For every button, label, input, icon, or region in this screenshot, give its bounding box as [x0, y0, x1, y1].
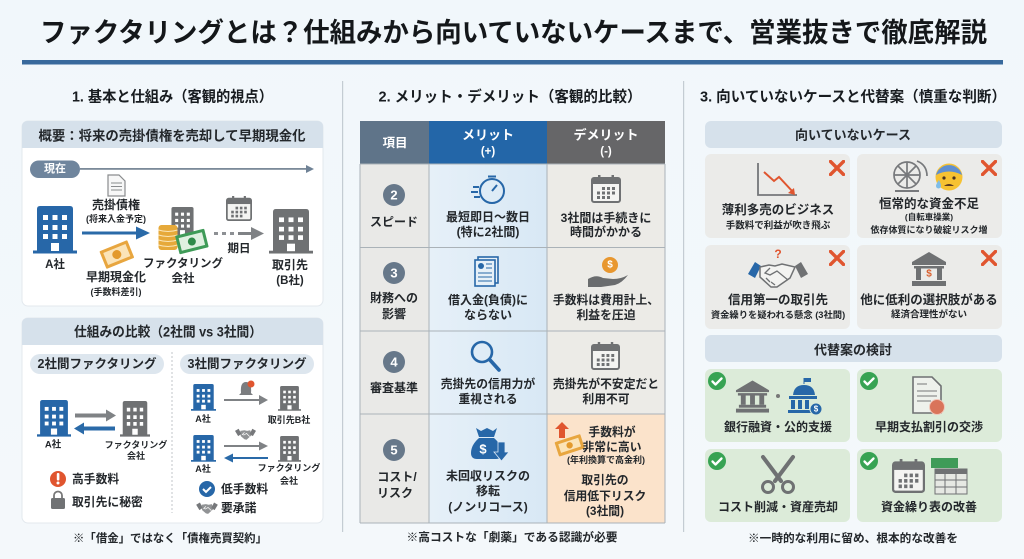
- card: cheaper options: [857, 245, 1002, 329]
- row: cost and risk: コスト/: [377, 470, 417, 484]
- sub-panel: three-party: ファクタリング: [258, 462, 320, 473]
- title: ファクタリングとは？仕組みから向いていないケースまで、営業抜きで徹底解説: [40, 17, 987, 48]
- sub-panel: two-party: 高手数料: [72, 472, 119, 486]
- panel heading: overview: 概要：将来の売掛債権を売却して早期現金化: [38, 128, 306, 144]
- heading: column 2: 2. メリット・デメリット（客観的比較）: [378, 88, 642, 106]
- card: low margin business: 薄利多売のビジネス: [722, 202, 834, 217]
- column 1: basics and mechanism: [22, 88, 323, 545]
- card: cash-flow improvement: 資金繰り表の改善: [881, 499, 977, 514]
- footnote: column 2: ※高コストな「劇薬」である認識が必要: [406, 530, 618, 544]
- card: chronic cash shortage: (自転車操業): [905, 212, 953, 222]
- icon: company A: [33, 206, 77, 271]
- card: credit first clients: 資金繰りを疑われる懸念 (3社間): [711, 309, 845, 320]
- icon: client B: 取引先: [272, 257, 308, 272]
- icon: client B: (B社): [276, 273, 304, 287]
- icon: anxious face: [936, 164, 962, 190]
- row: cost and risk: 移転: [476, 483, 500, 498]
- sub-panel: three-party: 要承諾: [221, 501, 257, 515]
- row: cost and risk: 5: [390, 442, 398, 458]
- card: bank loans and public support: [705, 369, 850, 442]
- row: finance: 手数料は費用計上、: [553, 293, 659, 307]
- sub-panel: two-party: 会社: [127, 450, 145, 461]
- sub-panel: three-party: 取引先B社: [268, 414, 310, 425]
- row: cost and risk: 未回収リスクの: [446, 468, 530, 483]
- footnote: column 3: ※一時的な利用に留め、根本的な改善を: [748, 531, 958, 545]
- card: cash-flow improvement: [857, 449, 1002, 522]
- card: early payment discount: [857, 369, 1002, 442]
- table header: 項目: [382, 136, 408, 150]
- column 3: unsuitable cases and alternatives: [700, 88, 1006, 545]
- card: cheaper options: 他に低利の選択肢がある: [860, 292, 998, 307]
- card: cheaper options: 経済合理性がない: [891, 308, 967, 320]
- row: speed: [370, 175, 651, 239]
- icon: calendar: [592, 342, 619, 369]
- row: screening: 売掛先の信用力が: [441, 377, 535, 391]
- row: cost and risk: 信用低下リスク: [564, 489, 646, 503]
- icon: hand with coin: $: [607, 260, 613, 270]
- icon: factoring company with coins and cash: ファクタリング: [143, 256, 224, 270]
- row: finance: 利益を圧迫: [576, 308, 636, 322]
- card: low margin business: [705, 154, 850, 238]
- row: screening: 売掛先が不安定だと: [553, 377, 659, 391]
- icon: factoring company with coins and cash: [143, 207, 224, 285]
- icon: rising cost: [554, 422, 585, 457]
- panel heading: comparison: 仕組みの比較（2社間 vs 3社間）: [74, 324, 262, 340]
- label: early cash: [86, 269, 146, 297]
- row: finance: [370, 257, 659, 322]
- icon: factoring company with coins and cash: 会社: [172, 271, 195, 285]
- sub-panel: two-party: 取引先に秘密: [72, 495, 143, 509]
- panel heading: unsuitable cases: [705, 121, 1002, 148]
- icon: orange money: [99, 240, 134, 269]
- sub-panel: three-party: 3社間ファクタリング: [188, 356, 307, 371]
- icon: magnifier: [472, 342, 499, 370]
- icon: client B: [269, 209, 313, 287]
- row: screening: 審査基準: [370, 380, 418, 395]
- icon: report: [475, 257, 498, 286]
- heading: column 3: 3. 向いていないケースと代替案（慎重な判断）: [700, 88, 1006, 106]
- card: bank loans and public support: $: [814, 404, 819, 414]
- timeline: now: 現在: [44, 161, 66, 175]
- row: finance: 財務への: [370, 290, 418, 305]
- icon: company A: A社: [45, 257, 65, 271]
- card: bank loans and public support: 銀行融資・公的支援: [724, 419, 832, 434]
- row: cost and risk: (年利換算で高金利): [567, 454, 645, 465]
- sub-panel: three-party: 低手数料: [221, 482, 268, 496]
- table header: メリット: [462, 128, 514, 142]
- table header: [360, 121, 665, 164]
- icon: calendar: [227, 196, 251, 220]
- icon: money bag: [471, 428, 509, 461]
- card: cost cuts and asset sales: コスト削減・資産売却: [718, 499, 838, 514]
- row: speed: 最短即日〜数日: [446, 209, 530, 224]
- sub-panel: two-party: 2社間ファクタリング: [38, 356, 157, 371]
- sub-panel: three-party: [180, 354, 320, 515]
- sub-panel: three-party: A社: [195, 413, 211, 424]
- card: chronic cash shortage: 恒常的な資金不足: [879, 196, 979, 211]
- row: speed: スピード: [370, 215, 418, 229]
- label: receivables: (将来入金予定): [86, 213, 146, 224]
- arrow: due date: [214, 227, 264, 255]
- row: cost and risk: (ノンリコース): [448, 500, 528, 514]
- row: speed: (特に2社間): [457, 224, 519, 239]
- card: credit first clients: ?: [774, 247, 782, 261]
- card: cheaper options: $: [926, 268, 932, 280]
- sub-panel: two-party: A社: [45, 438, 62, 450]
- sub-panel: three-party: 会社: [280, 475, 298, 486]
- sub-panel: two-party: [30, 354, 167, 509]
- panel heading: alternatives: [705, 335, 1002, 362]
- icon: document: [108, 175, 125, 196]
- label: early cash: 早期現金化: [86, 269, 146, 284]
- card: credit first clients: 信用第一の取引先: [728, 292, 828, 307]
- row: speed: 3社間は手続きに: [561, 210, 651, 225]
- panel heading: alternatives: 代替案の検討: [814, 342, 892, 358]
- label: receivables: 売掛債権: [92, 197, 140, 212]
- footnote: column 1: ※「借金」ではなく「債権売買契約」: [73, 531, 267, 545]
- row: cost and risk: [377, 422, 646, 518]
- heading: column 1: 1. 基本と仕組み（客観的視点）: [72, 88, 273, 106]
- icon: hand with coin: [588, 257, 628, 287]
- table: comparison: [360, 121, 665, 523]
- row: finance: ならない: [464, 308, 512, 322]
- column 2: merits and demerits: [360, 88, 665, 544]
- label: early cash: (手数料差引): [90, 286, 142, 297]
- card: cost cuts and asset sales: [705, 449, 850, 522]
- row: finance: 借入金(負債)に: [448, 292, 528, 307]
- row: speed: 2: [390, 188, 398, 202]
- icon: stopwatch: [471, 176, 504, 203]
- arrow: transfer: [82, 226, 150, 240]
- table header: デメリット: [573, 128, 639, 142]
- card: chronic cash shortage: 依存体質になり破綻リスク増: [870, 224, 988, 235]
- row: screening: [370, 342, 659, 406]
- label: receivables: [86, 197, 146, 224]
- row: cost and risk: 非常に高い: [582, 440, 642, 454]
- icon: money bag: $: [479, 442, 487, 456]
- card: early payment discount: 早期支払割引の交渉: [875, 419, 983, 434]
- card: chronic cash shortage: [857, 154, 1002, 238]
- row: cost and risk: リスク: [377, 486, 413, 500]
- row: cost and risk: 取引先の: [581, 473, 629, 487]
- row: screening: 利用不可: [582, 392, 630, 406]
- panel: comparison: [22, 318, 323, 523]
- table header: (+): [481, 146, 495, 158]
- row: screening: 重視される: [458, 392, 518, 406]
- row: screening: 4: [390, 354, 398, 370]
- timeline: now: [30, 160, 314, 178]
- table header: (-): [600, 146, 612, 158]
- panel heading: unsuitable cases: 向いていないケース: [795, 128, 911, 142]
- row: finance: 影響: [382, 306, 406, 321]
- icon: calendar: [592, 175, 620, 202]
- row: speed: 時間がかかる: [570, 224, 642, 239]
- row: cost and risk: (3社間): [586, 504, 624, 518]
- arrow: due date: 期日: [228, 241, 250, 255]
- card: low margin business: 手数料で利益が吹き飛ぶ: [726, 220, 831, 232]
- card: credit first clients: [705, 245, 850, 329]
- row: cost and risk: 手数料が: [588, 425, 636, 439]
- sub-panel: three-party: A社: [195, 463, 211, 474]
- panel: overview: [22, 121, 323, 306]
- row: finance: 3: [390, 266, 398, 280]
- sub-panel: two-party: ファクタリング: [105, 439, 167, 450]
